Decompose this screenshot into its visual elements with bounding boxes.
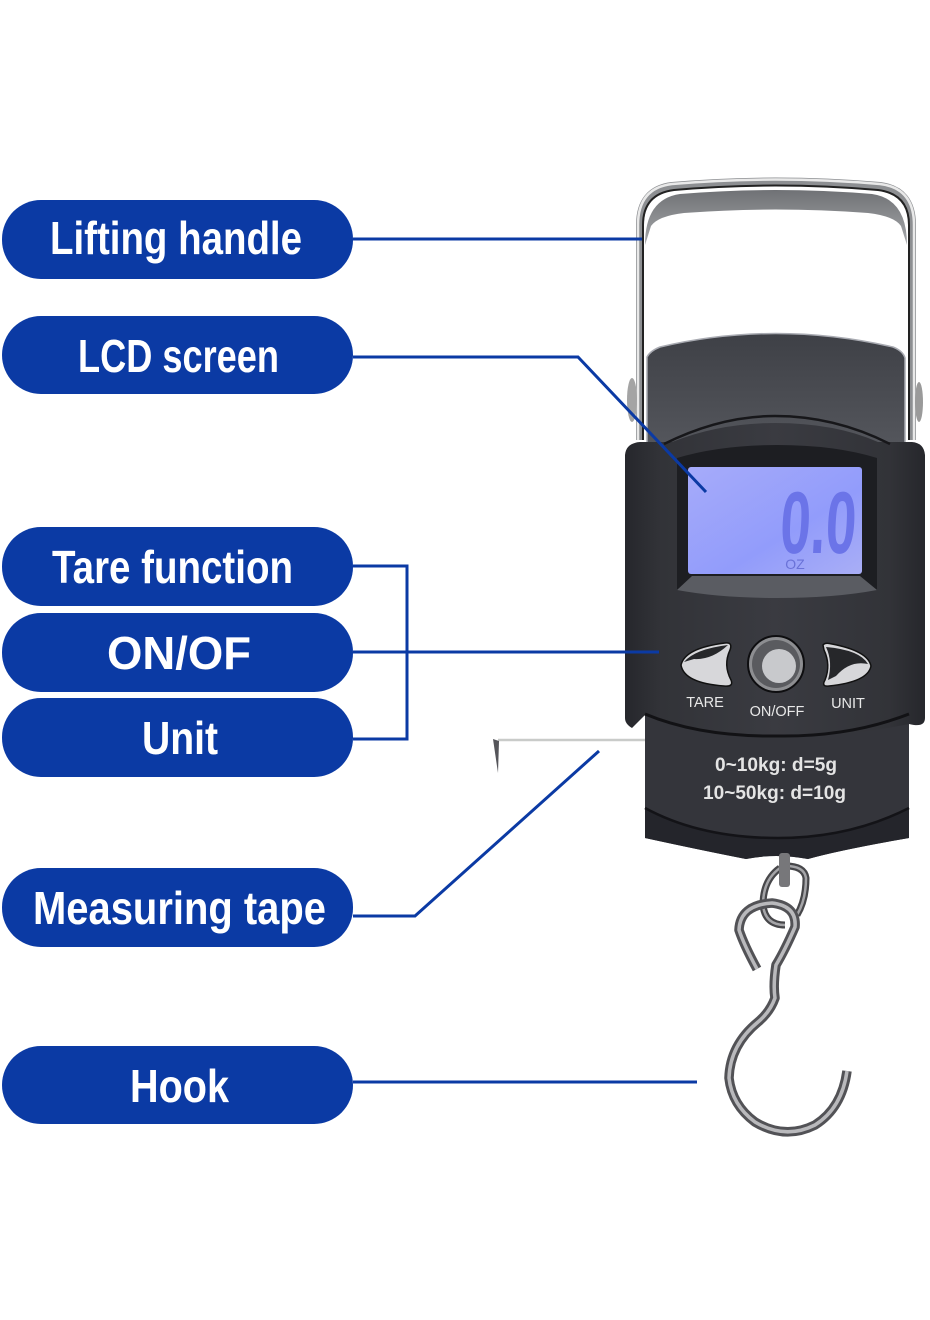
LCD reading: 0.0: [778, 474, 859, 572]
label: Tare function: Tare function: [52, 541, 293, 593]
label: Measuring tape: [2, 868, 353, 947]
label: ON/OF: ON/OF: [107, 627, 251, 679]
buttons: [681, 636, 871, 692]
label: Unit: Unit: [142, 712, 218, 764]
LCD unit: OZ: [785, 556, 805, 572]
hook: [729, 853, 847, 1132]
label: Measuring tape: Measuring tape: [33, 882, 326, 934]
lifting handle: [627, 180, 923, 440]
tare button: [681, 643, 732, 686]
LCD bezel: [677, 445, 877, 590]
label: LCD screen: [2, 316, 353, 394]
on/off button: [748, 636, 804, 692]
button labels: ON/OFF: [750, 704, 805, 720]
upper body: [647, 334, 905, 445]
label: Tare function: [2, 527, 353, 606]
label: Lifting handle: [2, 200, 353, 279]
label: Hook: [2, 1046, 353, 1124]
button labels: TARE: [686, 695, 724, 711]
scale illustration: [493, 180, 925, 1132]
LCD screen: [688, 467, 862, 574]
label: Lifting handle: Lifting handle: [50, 212, 302, 264]
range specification: [703, 755, 846, 804]
button labels: [686, 695, 865, 720]
label: Unit: [2, 698, 353, 777]
label: LCD screen: LCD screen: [78, 330, 279, 382]
label: ON/OF: [2, 613, 353, 692]
leader lines: [353, 239, 706, 1082]
range specification: 10~50kg: d=10g: [703, 783, 846, 804]
button labels: UNIT: [831, 696, 865, 712]
label: Hook: Hook: [130, 1060, 229, 1112]
lower body: [645, 700, 909, 859]
measuring tape: [493, 739, 645, 773]
unit button: [823, 643, 871, 686]
main body: [625, 423, 925, 736]
range specification: 0~10kg: d=5g: [715, 755, 837, 776]
